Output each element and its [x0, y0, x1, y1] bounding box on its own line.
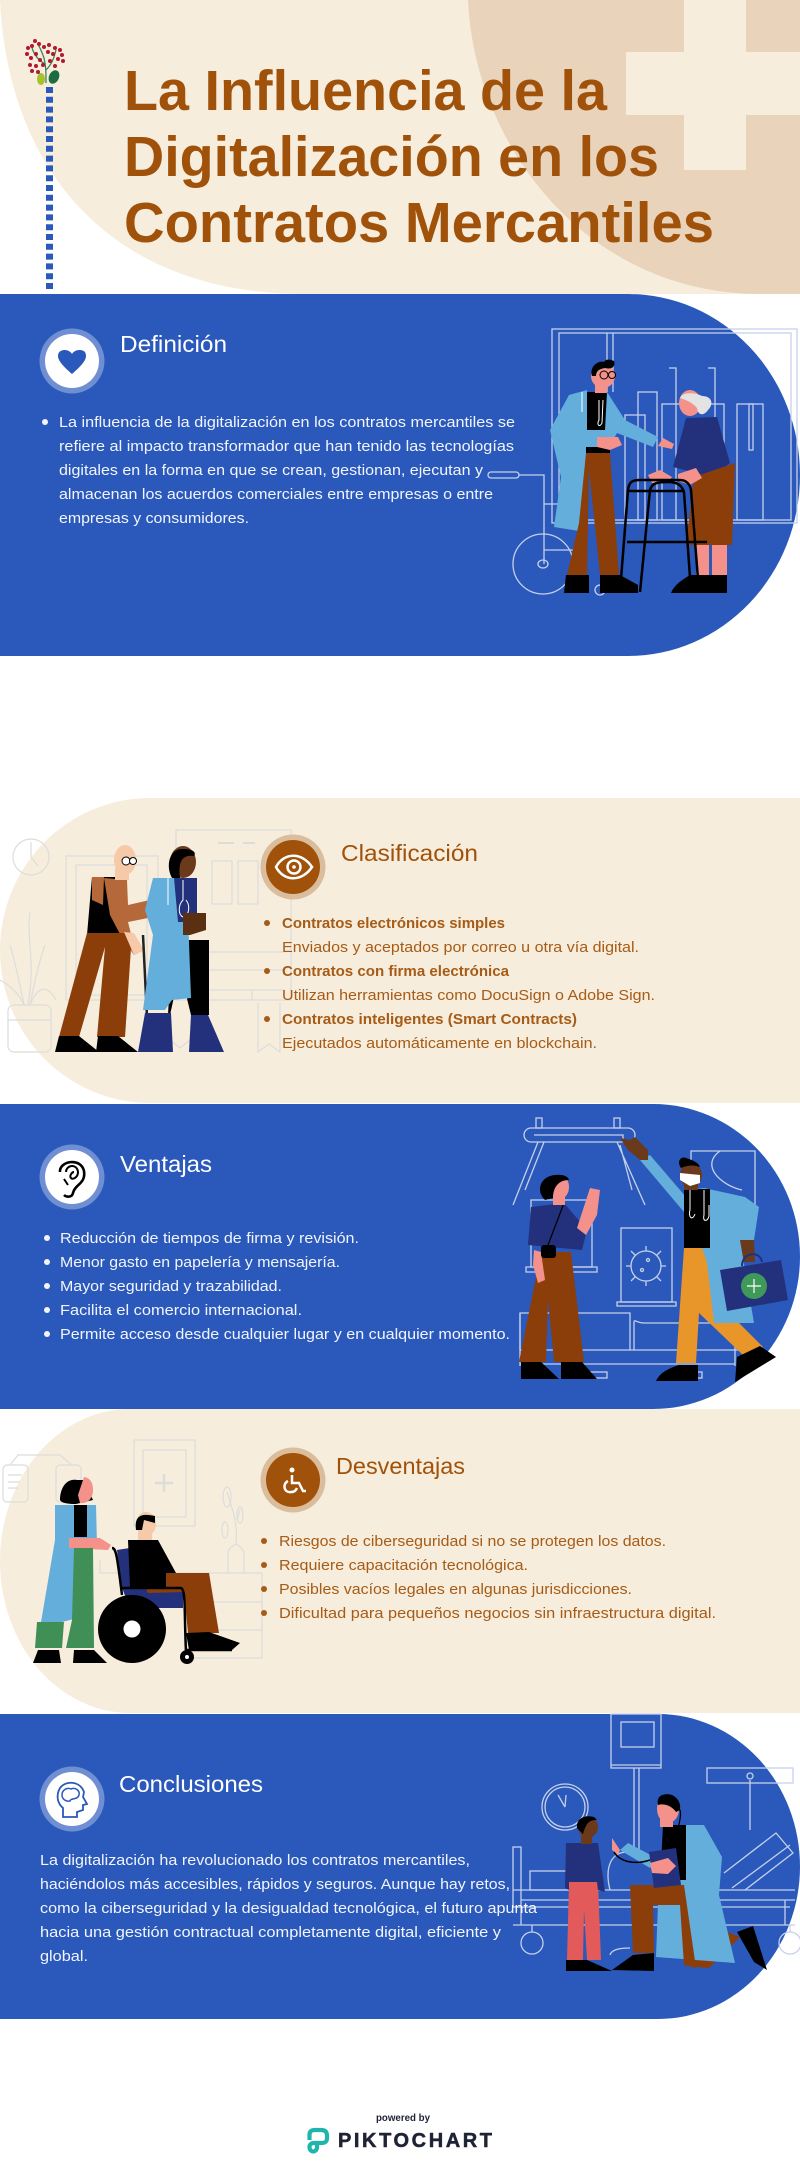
text block: definición: La influencia de la digitalización en los contratos mercantiles se [59, 414, 515, 431]
list: clasificación: Utilizan herramientas como DocuSign o Adobe Sign. [282, 987, 655, 1004]
list: clasificación [264, 915, 655, 1052]
list: ventajas: Permite acceso desde cualquier lugar y en cualquier momento. [60, 1326, 510, 1343]
text block: conclusiones: haciéndolos más accesibles, rápidos y seguros. Aunque hay retos, [40, 1876, 510, 1893]
icon: red flower sprig [25, 39, 65, 85]
list: desventajas: Posibles vacíos legales en algunas jurisdicciones. [279, 1581, 632, 1598]
icon: ear badge [40, 1144, 104, 1210]
header background [0, 0, 800, 294]
heading: definición: Definición [120, 331, 227, 357]
text block: conclusiones: global. [40, 1948, 88, 1965]
title: Digitalización en los [124, 125, 659, 189]
title [124, 59, 714, 255]
list: clasificación: Ejecutados automáticamente en blockchain. [282, 1035, 597, 1052]
icon: heart badge [40, 328, 104, 394]
heading: clasificación: Clasificación [341, 840, 478, 866]
text block: conclusiones: La digitalización ha revolucionado los contratos mercantiles, [40, 1852, 470, 1869]
heading: conclusiones: Conclusiones [119, 1771, 263, 1797]
text block: conclusiones [40, 1852, 538, 1965]
illustration: elderly man and nurse [0, 830, 291, 1052]
heading: ventajas: Ventajas [120, 1151, 212, 1177]
icon: piktochart logo [310, 2130, 327, 2152]
title: La Influencia de la [124, 59, 608, 123]
list: desventajas: Requiere capacitación tecnológica. [279, 1557, 528, 1574]
text block: definición: digitales en la forma en que se crean, gestionan, ejecutan y [59, 462, 484, 479]
panel: clasificación [0, 798, 800, 1103]
text block: definición: almacenan los acuerdos comerciales entre empresas o entre [59, 486, 493, 503]
list: ventajas: Mayor seguridad y trazabilidad. [60, 1278, 282, 1295]
illustration: patient and doctor with medical case [513, 1118, 788, 1382]
list: clasificación: Contratos electrónicos simples [282, 915, 505, 932]
illustration: nurse pushing wheelchair [3, 1440, 262, 1664]
heading: desventajas: Desventajas [336, 1453, 465, 1479]
list: desventajas: Dificultad para pequeños negocios sin infraestructura digital. [279, 1605, 716, 1622]
icon: wheelchair badge [260, 1448, 326, 1512]
list: clasificación: Contratos con firma electrónica [282, 963, 510, 980]
footer: powered by piktochart [310, 2112, 492, 2152]
list: clasificación: Enviados y aceptados por correo u otra vía digital. [282, 939, 639, 956]
title: Contratos Mercantiles [124, 191, 714, 255]
panel: ventajas [0, 1104, 800, 1409]
text block: definición: empresas y consumidores. [59, 510, 249, 527]
list: ventajas [44, 1230, 510, 1343]
list: desventajas [261, 1533, 716, 1622]
icon: brain head badge [40, 1766, 104, 1832]
text block: definición: refiere al impacto transformador que han tenido las tecnologías [59, 438, 514, 455]
panel: conclusiones [0, 1714, 800, 2019]
list: ventajas: Menor gasto en papelería y mensajería. [60, 1254, 340, 1271]
dotted vertical line [46, 87, 53, 292]
illustration: doctor and patient with walker [488, 329, 797, 595]
icon: eye badge [260, 834, 326, 900]
text block: conclusiones: como la ciberseguridad y la desigualdad tecnológica, el futuro apunta [40, 1900, 538, 1917]
footer: powered by piktochart: PIKTOCHART [338, 2130, 492, 2152]
text block: conclusiones: hacia una gestión contractual completamente digital, eficiente y [40, 1924, 502, 1941]
panel: desventajas [0, 1409, 800, 1713]
footer: powered by piktochart: powered by [376, 2112, 430, 2124]
illustration: doctor examining child [513, 1714, 800, 1971]
list: ventajas: Reducción de tiempos de firma y revisión. [60, 1230, 359, 1247]
list: ventajas: Facilita el comercio internacional. [60, 1302, 302, 1319]
text block: definición [42, 414, 515, 527]
list: desventajas: Riesgos de ciberseguridad si no se protegen los datos. [279, 1533, 666, 1550]
list: clasificación: Contratos inteligentes (Smart Contracts) [282, 1011, 577, 1028]
panel: definición [0, 294, 800, 656]
